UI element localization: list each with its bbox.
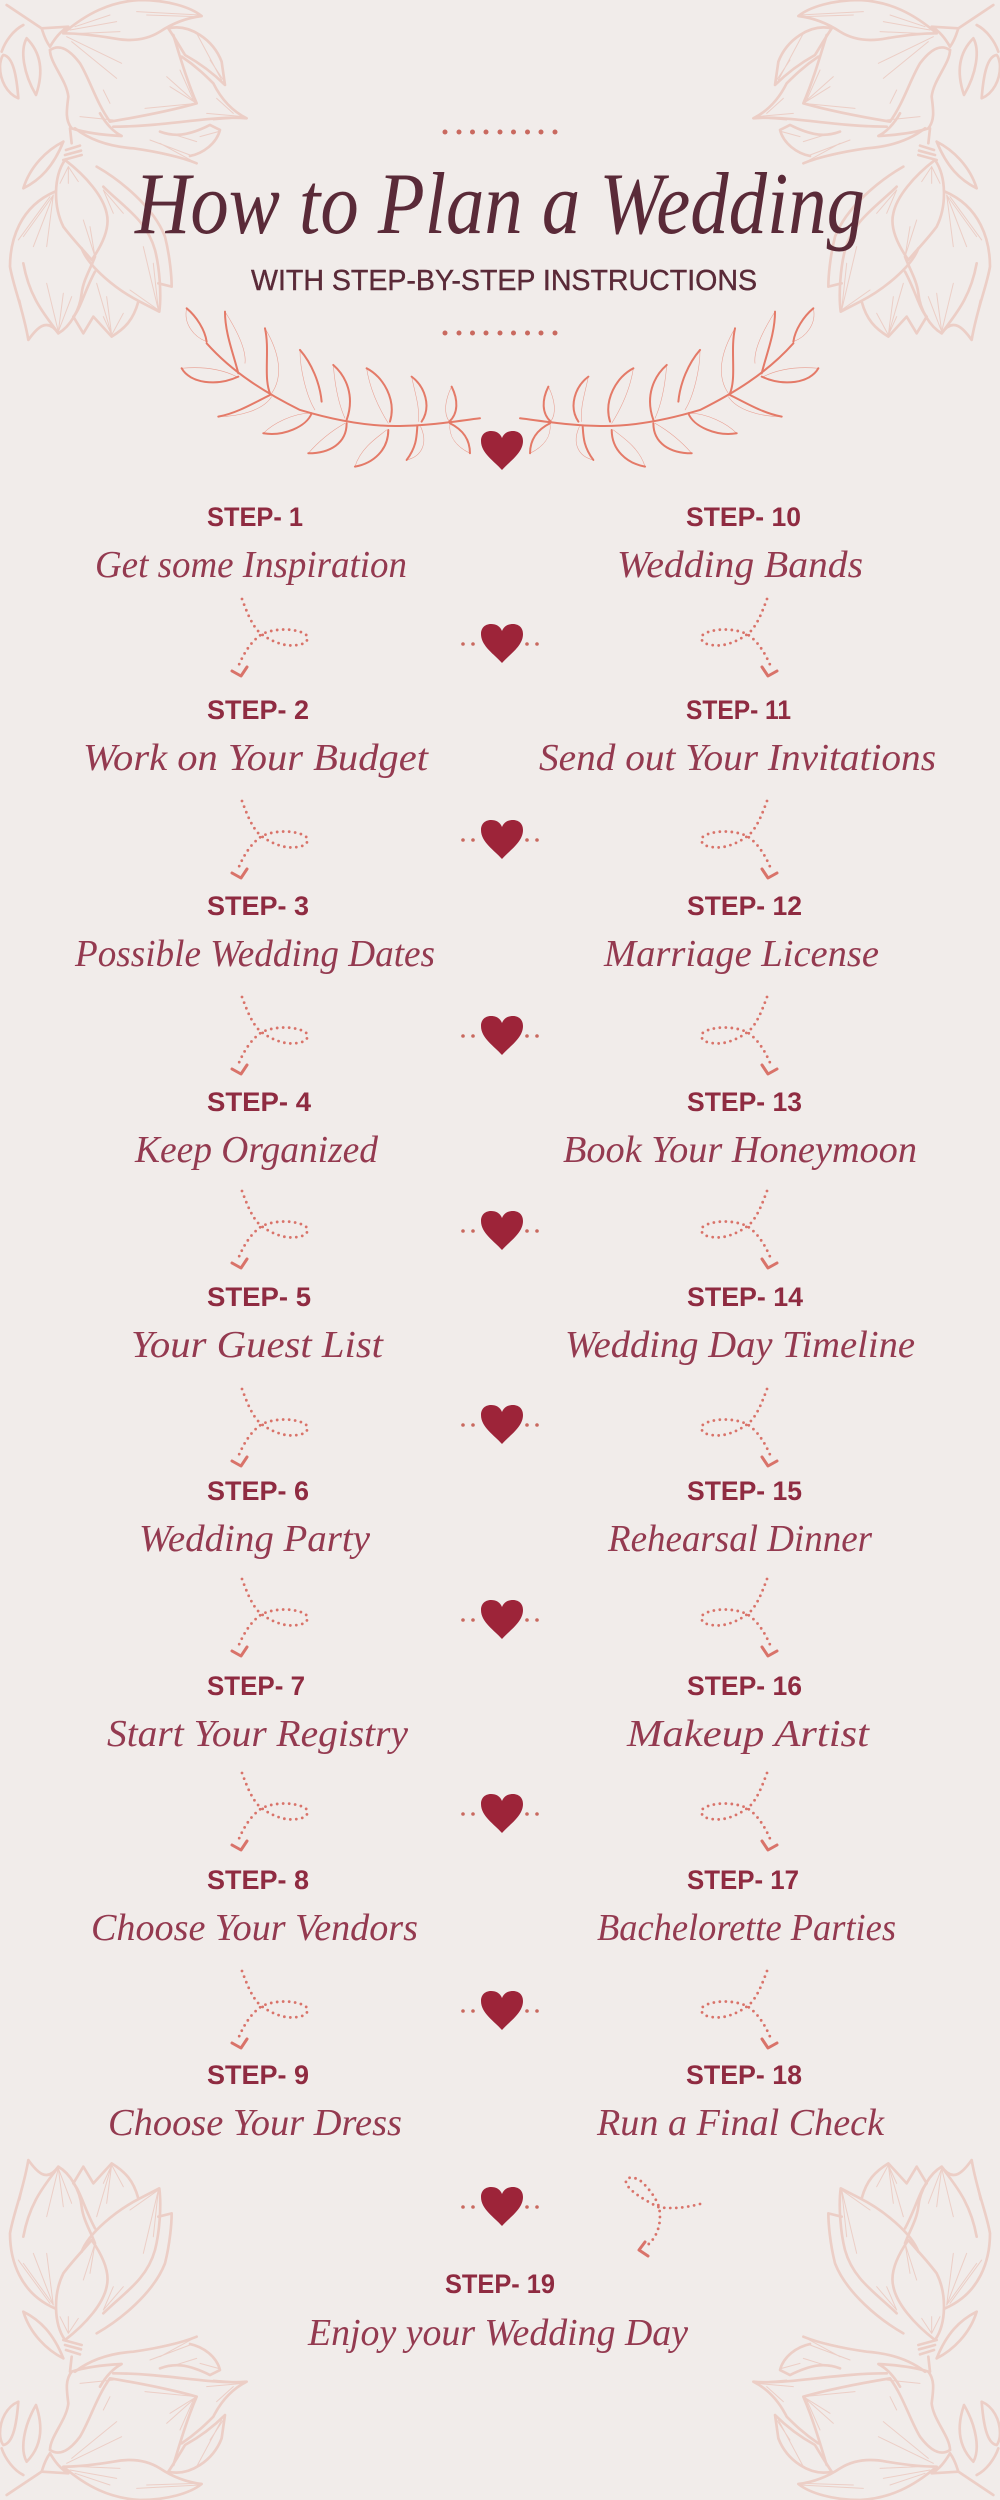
arrow right 3: [701, 997, 777, 1074]
icon: flower bottom-right: [753, 2160, 1000, 2500]
heart connector 6: [461, 1600, 539, 1639]
step 12: [603, 891, 879, 975]
step 8: STEP- 8: [207, 1865, 309, 1895]
icon: flower top-left: [0, 0, 247, 340]
step 10: STEP- 10: [686, 502, 801, 532]
icon: top heart: [481, 431, 523, 470]
step 13: STEP- 13: [687, 1087, 802, 1117]
step 14: [565, 1282, 915, 1366]
step 11: STEP- 11: [686, 695, 791, 725]
step 11: Send out Your Invitations: [539, 737, 936, 779]
step 17: [597, 1865, 896, 1949]
step 2: Work on Your Budget: [83, 737, 430, 779]
step 4: [134, 1087, 379, 1171]
step 13: [563, 1087, 917, 1171]
step 14: STEP- 14: [687, 1282, 803, 1312]
heart connector 8: [461, 1991, 539, 2030]
icon: flower bottom-left: [0, 2160, 247, 2500]
step 5: [131, 1282, 385, 1366]
arrow left 7: [232, 1773, 308, 1850]
dotted line above title: [442, 130, 558, 134]
step 8: Choose Your Vendors: [91, 1907, 418, 1949]
step 10: [617, 502, 863, 586]
arrow right 4: [701, 1191, 777, 1268]
arrow right 2: [701, 801, 777, 878]
step 7: STEP- 7: [207, 1671, 305, 1701]
step 3: Possible Wedding Dates: [74, 933, 435, 975]
step 15: STEP- 15: [687, 1476, 802, 1506]
arrow to final step: [626, 2178, 700, 2256]
step 15: Rehearsal Dinner: [607, 1518, 872, 1560]
step 3: STEP- 3: [207, 891, 309, 921]
step 17: STEP- 17: [687, 1865, 799, 1895]
step 5: Your Guest List: [131, 1324, 385, 1366]
step 15: [607, 1476, 872, 1560]
icon: left laurel branch: [182, 308, 480, 467]
arrow left 2: [232, 801, 308, 878]
step 2: [83, 695, 430, 779]
step 6: Wedding Party: [139, 1518, 370, 1560]
arrow right 8: [701, 1971, 777, 2048]
arrow left 1: [232, 599, 308, 676]
arrow left 4: [232, 1191, 308, 1268]
step 1: STEP- 1: [207, 502, 303, 532]
title: How to Plan a Wedding: [134, 156, 865, 253]
step 9: [108, 2060, 402, 2144]
arrow right 7: [701, 1773, 777, 1850]
arrow right 6: [701, 1579, 777, 1656]
icon: right laurel branch: [520, 308, 818, 467]
step 11: [539, 695, 936, 779]
step 12: Marriage License: [603, 933, 879, 975]
step 6: STEP- 6: [207, 1476, 309, 1506]
step 17: Bachelorette Parties: [597, 1907, 896, 1949]
step 1: Get some Inspiration: [95, 544, 407, 586]
step 16: Makeup Artist: [626, 1713, 871, 1755]
heart connector 1: [461, 624, 539, 663]
step 19: STEP- 19: [445, 2269, 555, 2299]
step 9: STEP- 9: [207, 2060, 309, 2090]
heart connector 2: [461, 820, 539, 859]
step 4: STEP- 4: [207, 1087, 311, 1117]
step 9: Choose Your Dress: [108, 2102, 402, 2144]
heart connector 7: [461, 1794, 539, 1833]
step 13: Book Your Honeymoon: [563, 1129, 917, 1171]
step 7: Start Your Registry: [107, 1713, 408, 1755]
step 3: [74, 891, 435, 975]
subtitle: WITH STEP-BY-STEP INSTRUCTIONS: [251, 265, 757, 297]
step 19: Enjoy your Wedding Day: [307, 2312, 688, 2354]
step 19: [307, 2269, 688, 2354]
step 16: STEP- 16: [687, 1671, 802, 1701]
heart connector 9: [461, 2187, 539, 2226]
arrow left 6: [232, 1579, 308, 1656]
heart connector 3: [461, 1016, 539, 1055]
icon: flower top-right: [753, 0, 1000, 340]
step 16: [626, 1671, 871, 1755]
arrow right 1: [701, 599, 777, 676]
step 12: STEP- 12: [687, 891, 802, 921]
step 7: [107, 1671, 408, 1755]
step 10: Wedding Bands: [617, 544, 863, 586]
heart connector 4: [461, 1211, 539, 1250]
arrow left 5: [232, 1389, 308, 1466]
step 1: [95, 502, 407, 586]
step 4: Keep Organized: [134, 1129, 379, 1171]
step 14: Wedding Day Timeline: [565, 1324, 915, 1366]
heart connector 5: [461, 1405, 539, 1444]
arrow left 3: [232, 997, 308, 1074]
dotted line below title: [442, 330, 558, 336]
step 5: STEP- 5: [207, 1282, 311, 1312]
step 8: [91, 1865, 418, 1949]
step 18: STEP- 18: [686, 2060, 802, 2090]
arrow left 8: [232, 1971, 308, 2048]
step 6: [139, 1476, 370, 1560]
step 18: Run a Final Check: [596, 2102, 885, 2144]
arrow right 5: [701, 1389, 777, 1466]
step 18: [596, 2060, 885, 2144]
step 2: STEP- 2: [207, 695, 309, 725]
